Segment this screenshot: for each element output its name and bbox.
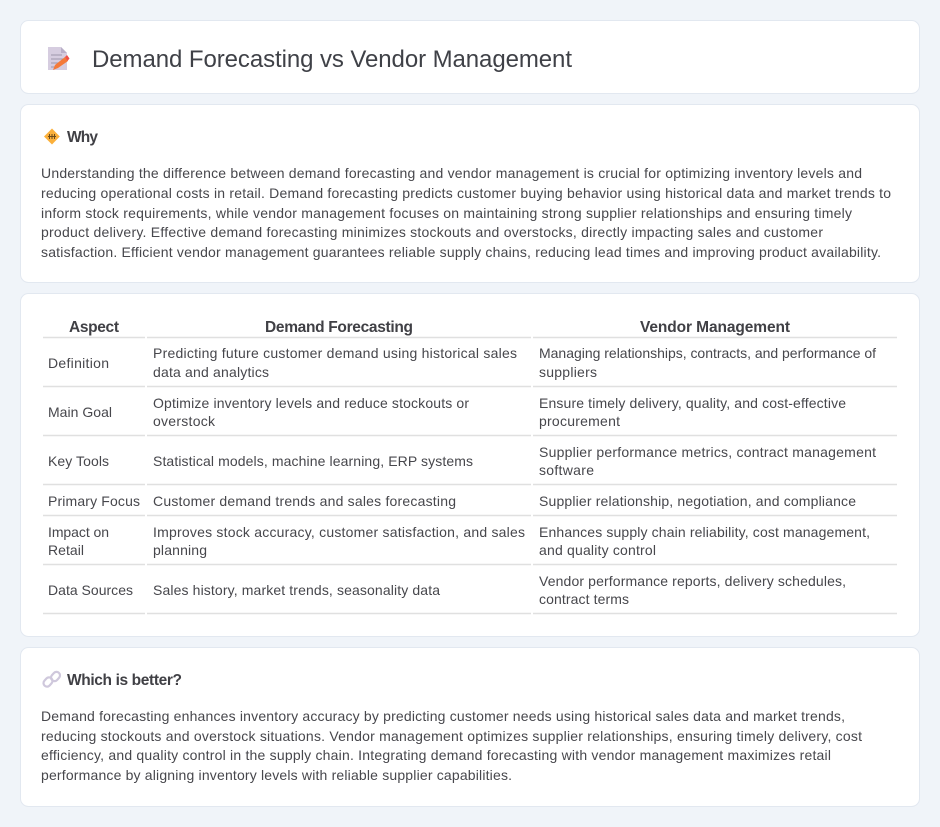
table row: data sources: contract terms [539, 591, 629, 607]
icon: document with pencil [48, 47, 70, 70]
text block: why: reducing operational costs in retail. Demand forecasting predicts customer buying behavior using historical data and market trends to [41, 185, 891, 201]
text block: why: inform stock requirements, while vendor management focuses on maintaining strong supplier relationships and ensuring timely [41, 205, 852, 221]
table row: main goal: Main Goal [48, 404, 112, 420]
text block: which is better: efficiency, and quality control in the supply chain. Integrating demand forecasting with vendor management maximizes retail [41, 747, 831, 763]
table row: data sources [48, 573, 846, 607]
table row: definition: suppliers [539, 364, 597, 380]
heading: why: Why [67, 129, 98, 146]
table row: key tools: Supplier performance metrics, contract management [539, 444, 876, 460]
table row: impact on retail: Improves stock accuracy, customer satisfaction, and sales [153, 524, 525, 540]
table row: impact on retail: and quality control [539, 542, 656, 558]
table row: definition: Definition [48, 355, 109, 371]
table row: impact on retail: Enhances supply chain reliability, cost management, [539, 524, 870, 540]
table row: data sources: Vendor performance reports, delivery schedules, [539, 573, 846, 589]
text block: which is better [41, 708, 862, 783]
table header row [69, 319, 790, 336]
text block: which is better: Demand forecasting enhances inventory accuracy by predicting customer needs using historical sales data and market trends, [41, 708, 845, 724]
icon: chain link [42, 670, 61, 688]
text block: why [41, 165, 891, 260]
table row: main goal [48, 395, 846, 429]
table row: primary focus: Primary Focus [48, 493, 140, 509]
panel: title header [20, 20, 920, 94]
text block: which is better: performance by aligning inventory levels with reliable supplier capabilities. [41, 767, 512, 783]
table row: data sources: Data Sources [48, 582, 133, 598]
table row: main goal: Ensure timely delivery, quality, and cost-effective [539, 395, 846, 411]
table row: impact on retail: planning [153, 542, 207, 558]
table header row: Aspect [69, 319, 119, 336]
heading: which is better: Which is better? [67, 672, 182, 689]
table row: definition: Managing relationships, contracts, and performance of [539, 345, 876, 361]
table row: definition: data and analytics [153, 364, 269, 380]
table row: main goal: procurement [539, 413, 620, 429]
table row: main goal: overstock [153, 413, 216, 429]
text block: which is better: reducing stockouts and overstock situations. Vendor management optimizes supplier relationships, ensuring timely delivery, cost [41, 728, 862, 744]
table row: key tools [48, 444, 876, 478]
panel: why [20, 104, 920, 282]
panel: which is better [20, 648, 920, 806]
table row: key tools: Statistical models, machine learning, ERP systems [153, 453, 473, 469]
table row: primary focus [48, 493, 856, 509]
table header row: Demand Forecasting [265, 319, 413, 336]
table row: data sources: Sales history, market trends, seasonality data [153, 582, 440, 598]
table row: impact on retail: Impact on [48, 524, 109, 540]
table row: definition: Predicting future customer demand using historical sales [153, 345, 517, 361]
icon: diamond sign [44, 128, 60, 144]
table row: primary focus: Customer demand trends and sales forecasting [153, 493, 456, 509]
table header row: Vendor Management [640, 319, 790, 336]
table row: key tools: software [539, 462, 594, 478]
text block: why: Understanding the difference between demand forecasting and vendor management is crucial for optimizing inventory levels and [41, 165, 862, 181]
table row: key tools: Key Tools [48, 453, 109, 469]
text block: why: product delivery. Effective demand forecasting minimizes stockouts and overstocks, directly impacting sales and customer [41, 224, 823, 240]
title: Demand Forecasting vs Vendor Management [92, 46, 572, 73]
panel: comparison table [20, 294, 920, 636]
table row: main goal: Optimize inventory levels and reduce stockouts or [153, 395, 469, 411]
text block: why: satisfaction. Efficient vendor management guarantees reliable supply chains, reducing lead times and improving product availability. [41, 244, 881, 260]
table row: primary focus: Supplier relationship, negotiation, and compliance [539, 493, 856, 509]
table row: impact on retail: Retail [48, 542, 84, 558]
table row: impact on retail [48, 524, 870, 558]
table row: definition [48, 345, 876, 380]
